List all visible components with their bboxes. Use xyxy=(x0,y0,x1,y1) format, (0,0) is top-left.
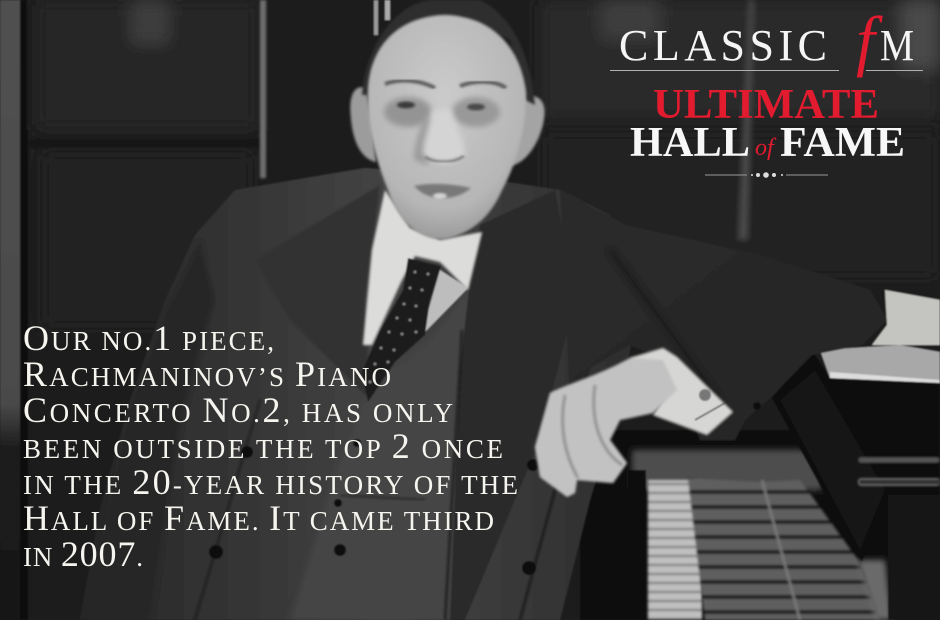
hair xyxy=(362,0,535,105)
dark jacket body xyxy=(80,168,640,620)
caption text block: IN THE 20-YEAR HISTORY OF THE xyxy=(23,462,518,502)
caption text block: RACHMANINOV’S PIANO xyxy=(23,354,391,394)
eyebrows xyxy=(385,81,435,88)
jacket lapel left xyxy=(255,185,380,400)
Classic FM wordmark: CLASSIC xyxy=(619,21,827,70)
logo: Classic FM Ultimate Hall of Fame xyxy=(610,2,923,178)
caption text block: HALL OF FAME. IT CAME THIRD xyxy=(23,498,494,538)
shirt cuff xyxy=(630,348,733,435)
Hall of Fame heading xyxy=(630,120,905,166)
eyes xyxy=(397,102,415,108)
mouth xyxy=(414,184,471,198)
sleeve resting on piano xyxy=(560,190,887,440)
eye sockets xyxy=(384,97,432,127)
shirt and collar xyxy=(363,190,482,345)
piano xyxy=(580,290,940,620)
waistcoat xyxy=(290,285,470,620)
face xyxy=(368,15,526,239)
buttons xyxy=(209,402,761,575)
nose shadow xyxy=(414,115,436,165)
Hall of Fame heading: HALL xyxy=(630,120,750,166)
head xyxy=(350,0,544,239)
nose xyxy=(423,108,465,163)
ears xyxy=(350,87,544,166)
Classic FM wordmark: M xyxy=(880,21,914,70)
Classic FM wordmark: f xyxy=(856,2,883,78)
caption text block: OUR NO.1 PIECE, xyxy=(23,318,274,358)
cufflink xyxy=(699,389,711,401)
Hall of Fame heading: FAME xyxy=(780,120,905,166)
ornament divider xyxy=(705,172,828,178)
caption text block: CONCERTO NO.2, HAS ONLY xyxy=(23,390,453,430)
hand xyxy=(535,358,677,497)
Ultimate heading: ULTIMATE xyxy=(653,82,879,128)
hand and shirt cuff xyxy=(535,348,733,497)
caption text block xyxy=(23,318,518,574)
caption text block: IN 2007. xyxy=(23,534,143,574)
polka dot tie xyxy=(362,258,441,402)
Classic FM wordmark xyxy=(610,2,923,78)
sheet music xyxy=(820,290,940,383)
Hall of Fame heading: of xyxy=(755,135,777,161)
caption text block: BEEN OUTSIDE THE TOP 2 ONCE xyxy=(23,426,503,466)
